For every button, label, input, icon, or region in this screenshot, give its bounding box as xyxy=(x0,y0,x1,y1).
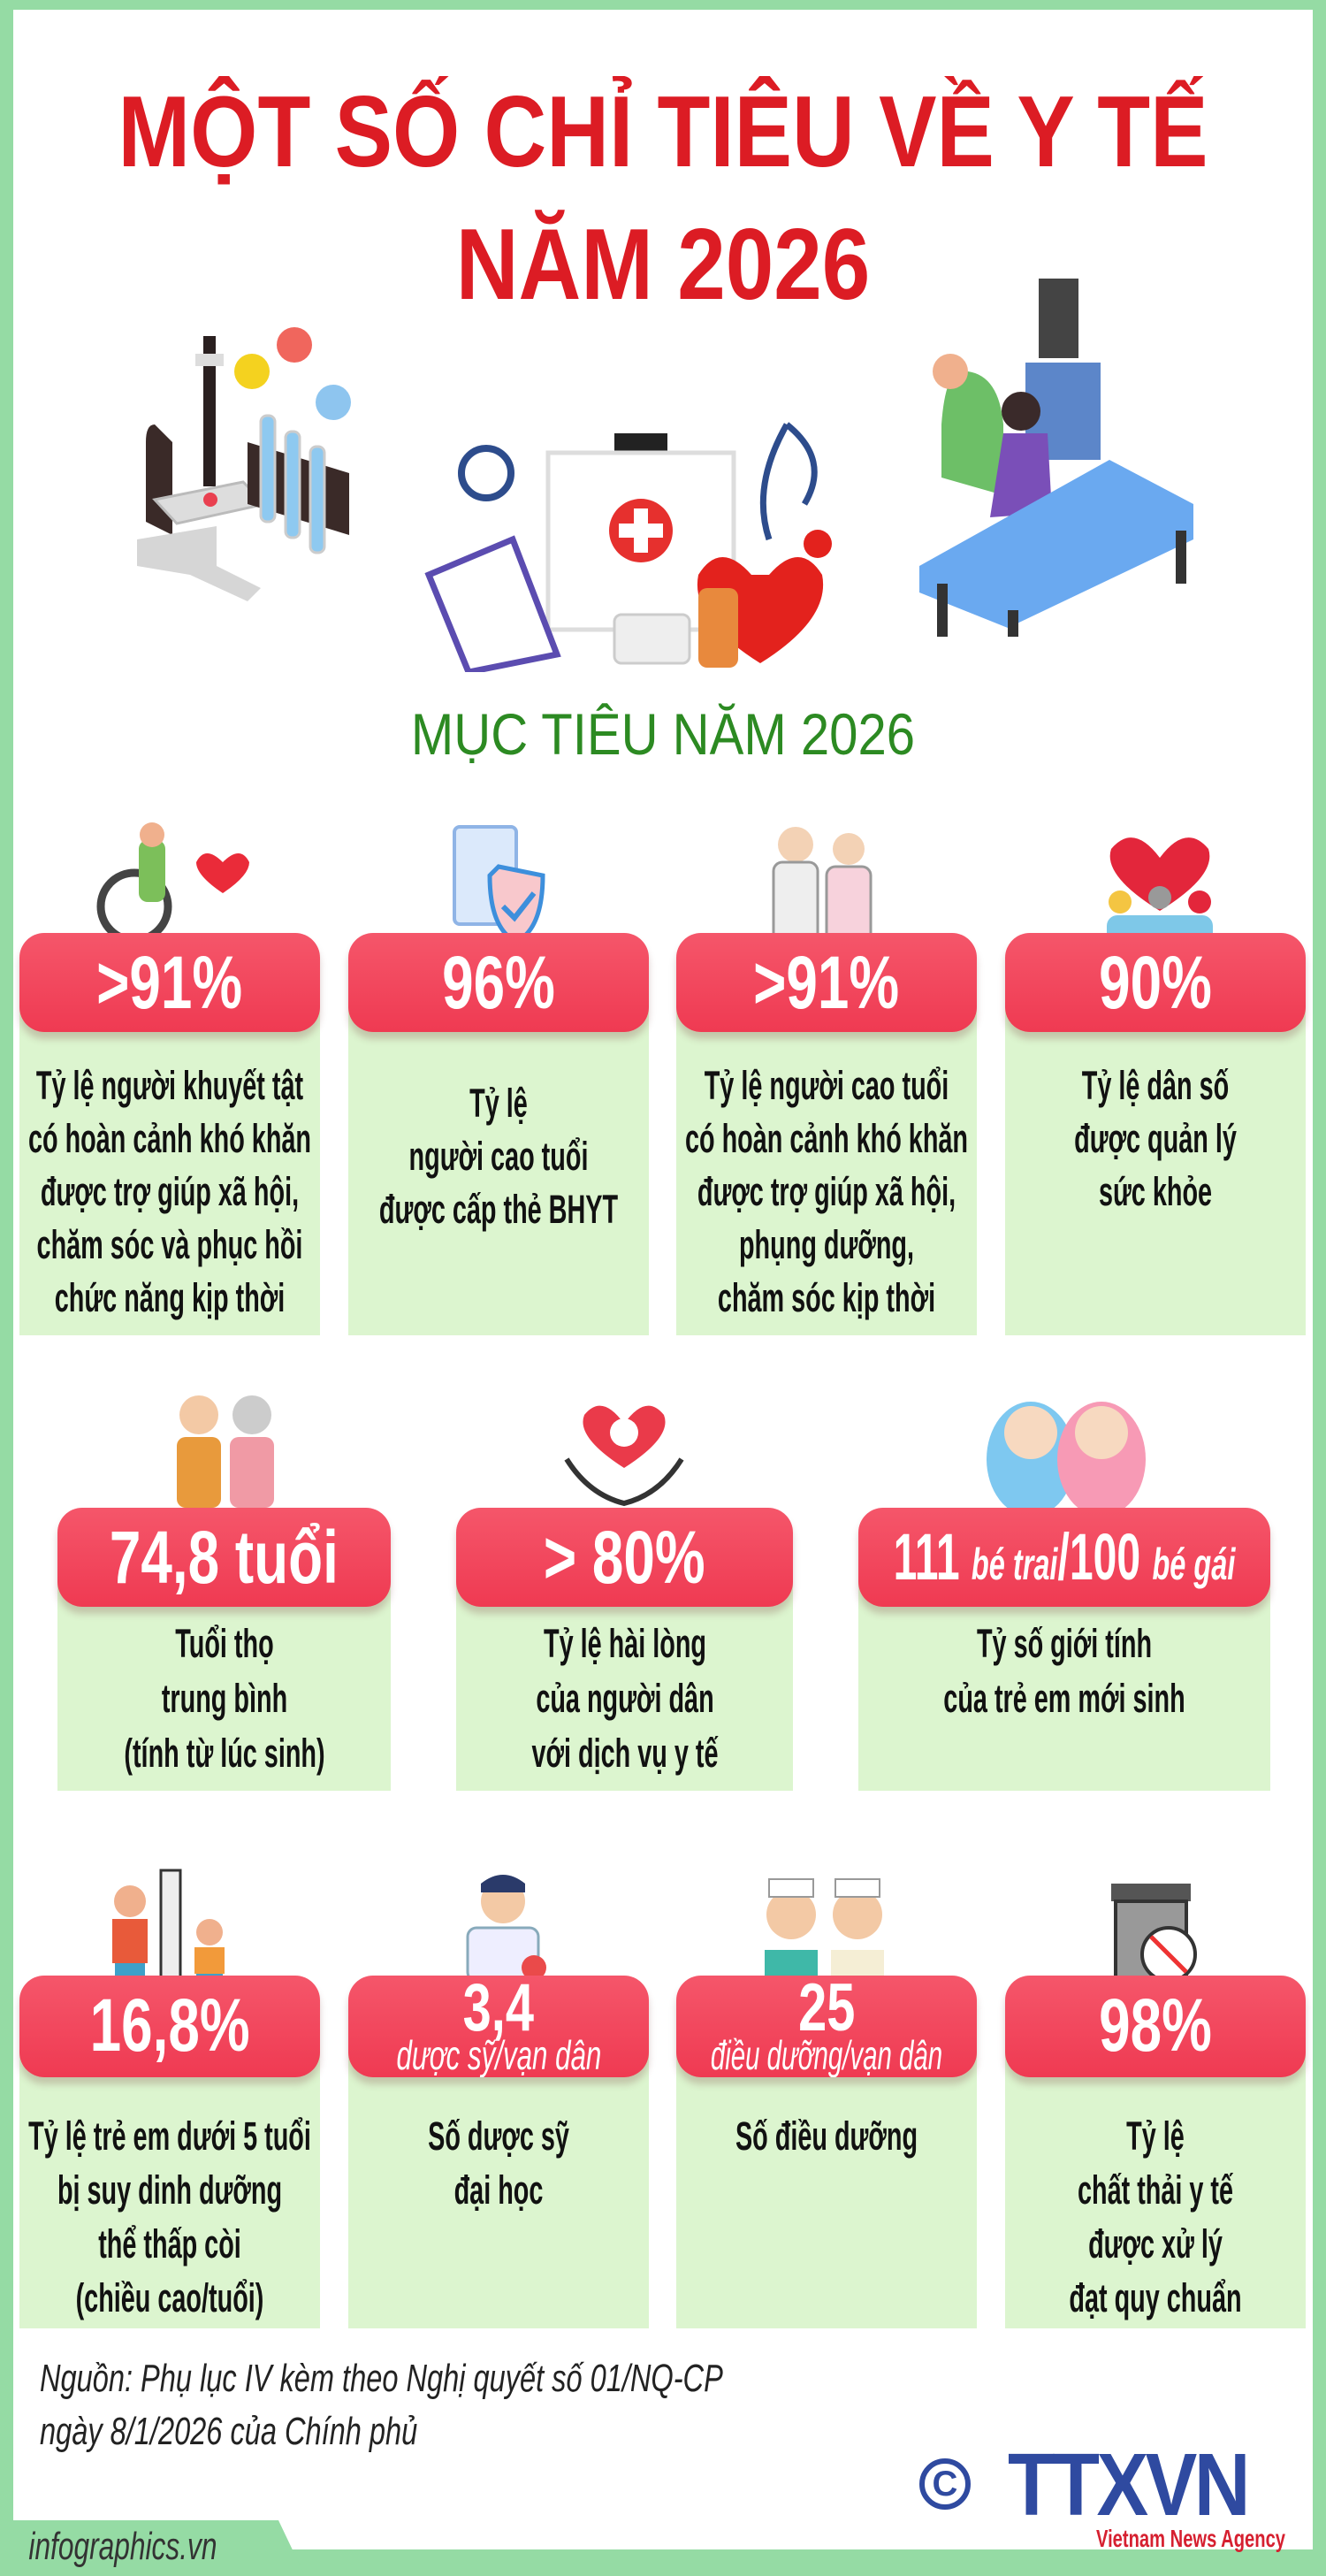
description: của người dân xyxy=(536,1676,713,1721)
icon: elderly couple xyxy=(177,1395,274,1508)
subtitle: MỤC TIÊU NĂM 2026 xyxy=(411,701,915,767)
value pill xyxy=(858,1508,1270,1607)
illustration: ultrasound scene xyxy=(919,279,1193,637)
description xyxy=(379,1081,618,1232)
description: phụng dưỡng, xyxy=(739,1222,914,1267)
source text: ngày 8/1/2026 của Chính phủ xyxy=(40,2410,417,2453)
description: có hoàn cảnh khó khăn xyxy=(28,1116,311,1161)
title line 2: NĂM 2026 xyxy=(456,209,870,321)
description: Tỷ lệ người khuyết tật xyxy=(36,1063,303,1108)
icon: pharmacist xyxy=(467,1875,546,1976)
description: chất thải y tế xyxy=(1078,2167,1233,2213)
value pill: 90% xyxy=(1099,941,1212,1024)
value pill xyxy=(456,1508,793,1607)
value pill: > 80% xyxy=(544,1516,705,1599)
footer: infographics.vn tab: infographics.vn xyxy=(28,2525,217,2568)
panel: elderly support xyxy=(674,827,979,1335)
value pill: điều dưỡng/vạn dân xyxy=(711,2032,942,2077)
description: Tỷ lệ hài lòng xyxy=(543,1621,706,1666)
icon: people heart xyxy=(1107,837,1213,933)
value pill xyxy=(676,933,977,1032)
icon: children height xyxy=(112,1869,225,1976)
description: được xử lý xyxy=(1088,2221,1223,2266)
value pill: dược sỹ/vạn dân xyxy=(397,2032,601,2077)
logo: TTXVN: C xyxy=(933,2465,957,2503)
panel: medical waste xyxy=(1002,1884,1308,2328)
description: sức khỏe xyxy=(1099,1169,1212,1214)
description: được trợ giúp xã hội, xyxy=(697,1169,956,1214)
description: với dịch vụ y tế xyxy=(531,1731,718,1776)
value pill xyxy=(1005,1976,1306,2077)
description: Tỷ lệ trẻ em dưới 5 tuổi xyxy=(28,2114,311,2159)
description xyxy=(428,2114,569,2213)
description xyxy=(531,1621,719,1776)
description xyxy=(1069,2114,1242,2320)
value pill xyxy=(348,933,649,1032)
description: Số dược sỹ xyxy=(428,2114,569,2159)
value pill: 98% xyxy=(1099,1984,1212,2067)
title: MỘT SỐ CHỈ TIÊU VỀ Y TẾ xyxy=(118,76,1208,188)
description xyxy=(28,1063,311,1320)
icon: nurses xyxy=(765,1878,884,1976)
value pill: >91% xyxy=(753,941,900,1024)
description: được quản lý xyxy=(1074,1116,1237,1161)
description xyxy=(124,1621,324,1776)
value pill xyxy=(19,933,320,1032)
value pill: 96% xyxy=(442,941,555,1024)
logo: TTXVN: Vietnam News Agency xyxy=(1096,2525,1285,2552)
logo: TTXVN xyxy=(919,2435,1285,2552)
panel: life expectancy xyxy=(55,1395,394,1791)
icon: hands heart xyxy=(564,1406,684,1507)
description xyxy=(943,1621,1185,1721)
icon: babies xyxy=(987,1402,1146,1508)
description: Tỷ số giới tính xyxy=(977,1621,1152,1666)
panel: stunting xyxy=(16,1869,324,2328)
value pill xyxy=(676,1976,977,2077)
description: Tỷ lệ xyxy=(1126,2114,1185,2159)
icon: waste bin xyxy=(1111,1884,1197,1976)
illustration: microscope xyxy=(137,327,351,601)
illustration: medical kit xyxy=(424,422,832,672)
description: Tuổi thọ xyxy=(175,1621,273,1666)
value pill: 16,8% xyxy=(89,1984,250,2067)
description: trung bình xyxy=(161,1676,287,1721)
logo: TTXVN: TTXVN xyxy=(1008,2435,1247,2534)
source text xyxy=(40,2357,723,2453)
panel: disabled support xyxy=(16,822,324,1335)
description: được cấp thẻ BHYT xyxy=(379,1187,618,1232)
panel: pharmacists xyxy=(345,1875,652,2328)
description: chăm sóc kịp thời xyxy=(718,1275,935,1320)
panel: satisfaction xyxy=(453,1406,796,1791)
value pill xyxy=(19,1976,320,2077)
description: Tỷ lệ xyxy=(469,1081,528,1126)
description: Tỷ lệ người cao tuổi xyxy=(705,1063,949,1108)
icon: caregiver xyxy=(773,827,872,933)
description: chăm sóc và phục hồi xyxy=(37,1222,302,1267)
description: Số điều dưỡng xyxy=(735,2114,918,2159)
panel: sex ratio xyxy=(856,1402,1273,1791)
description xyxy=(1074,1063,1237,1214)
description: được trợ giúp xã hội, xyxy=(41,1169,299,1214)
description: (chiều cao/tuổi) xyxy=(76,2275,263,2320)
panel: elderly insurance xyxy=(345,825,652,1335)
icon: wheelchair heart xyxy=(97,822,249,933)
description: đạt quy chuẩn xyxy=(1069,2275,1242,2320)
value pill xyxy=(348,1976,649,2077)
panel: nurses xyxy=(674,1878,979,2328)
source text: Nguồn: Phụ lục IV kèm theo Nghị quyết số 01/NQ-CP xyxy=(40,2357,723,2400)
value pill: >91% xyxy=(96,941,243,1024)
description: của trẻ em mới sinh xyxy=(943,1676,1185,1721)
description: người cao tuổi xyxy=(409,1134,588,1179)
value pill: 111 bé trai/100 bé gái xyxy=(894,1520,1235,1594)
value pill xyxy=(1005,933,1306,1032)
description: đại học xyxy=(454,2167,543,2213)
description: bị suy dinh dưỡng xyxy=(57,2167,282,2213)
value pill: 74,8 tuổi xyxy=(110,1516,339,1599)
description xyxy=(685,1063,968,1320)
footer: infographics.vn tab xyxy=(13,2520,293,2567)
value pill xyxy=(57,1508,391,1607)
description: chức năng kịp thời xyxy=(55,1275,285,1320)
panel: population health xyxy=(1002,837,1308,1335)
description xyxy=(28,2114,311,2320)
icon: insurance shield xyxy=(453,825,545,933)
description: thể thấp còi xyxy=(98,2221,241,2266)
description: có hoàn cảnh khó khăn xyxy=(685,1116,968,1161)
description: (tính từ lúc sinh) xyxy=(124,1731,324,1776)
description: Tỷ lệ dân số xyxy=(1082,1063,1229,1108)
